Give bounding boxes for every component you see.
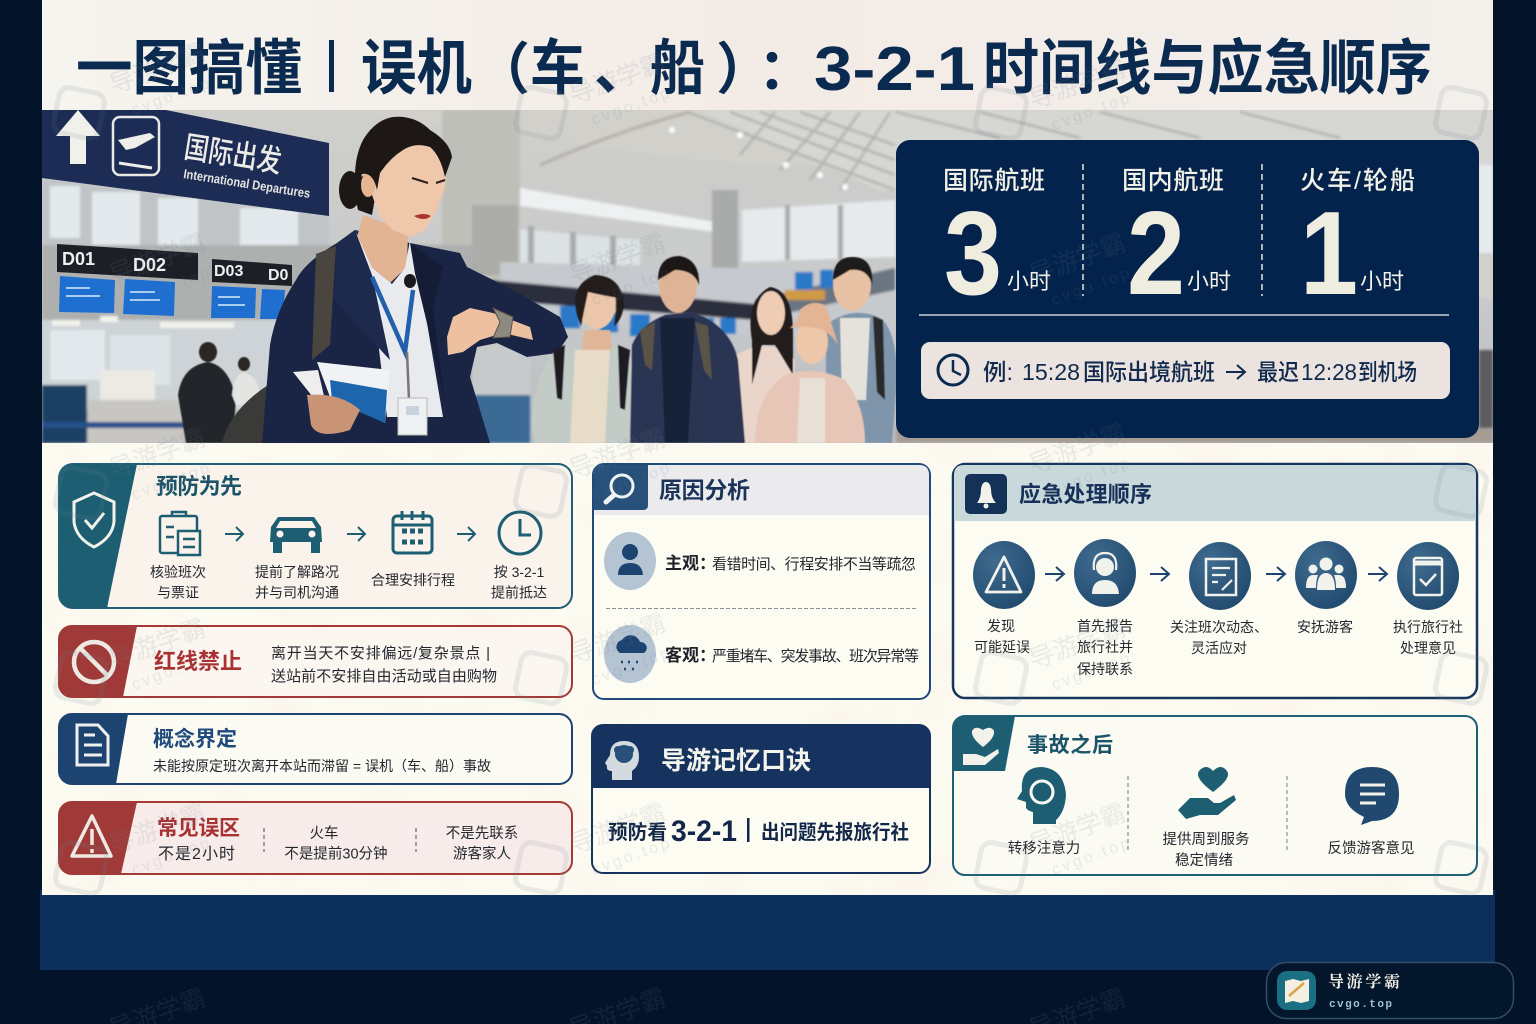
head bbox=[372, 145, 446, 237]
heading: 常见误区 bbox=[157, 817, 240, 840]
item: 火车 bbox=[310, 826, 338, 842]
watermarks: 导游学霸 bbox=[106, 39, 209, 99]
bottom blue strip bbox=[40, 890, 1495, 970]
step 5 icon bbox=[1397, 542, 1459, 610]
step label: 可能延误 bbox=[974, 639, 1030, 655]
title band bbox=[42, 0, 1493, 112]
mnemonic text: 出问题先报旅行社 bbox=[761, 821, 909, 844]
panel: causes: 看错时间、行程安排不当等疏忽 bbox=[712, 555, 916, 573]
watermarks: cvgo.top bbox=[129, 459, 215, 504]
logo badge bbox=[1266, 962, 1514, 1018]
arrow bbox=[347, 527, 365, 541]
mic bbox=[404, 274, 416, 288]
icon: clipboard bbox=[160, 512, 200, 555]
watermarks: cvgo.top bbox=[1049, 454, 1135, 499]
heading: 导游记忆口诀 bbox=[661, 747, 811, 775]
title: ： bbox=[758, 38, 814, 101]
panel: prevention bbox=[59, 464, 572, 608]
watermarks: 导游学霸 bbox=[566, 49, 669, 109]
unit hours: 小时 bbox=[1187, 269, 1231, 294]
hair bbox=[355, 116, 452, 190]
label: domestic: 国内航班 bbox=[1122, 167, 1224, 195]
watermarks: cvgo.top bbox=[129, 264, 215, 309]
icon: shield bbox=[74, 493, 114, 547]
tour group bbox=[532, 256, 897, 443]
watermarks: 导游学霸 bbox=[566, 609, 669, 669]
man bbox=[630, 312, 745, 443]
number 2: 2 bbox=[1127, 187, 1185, 320]
step label: 核验班次 bbox=[150, 564, 206, 580]
title: （ bbox=[474, 38, 530, 101]
back hair bbox=[339, 171, 357, 209]
neck bbox=[357, 215, 408, 283]
gate boards bbox=[57, 244, 292, 319]
icon: document bbox=[77, 725, 108, 765]
divider bbox=[1128, 776, 1287, 852]
icon: bell bbox=[965, 474, 1007, 514]
logo badge: 导游学霸 bbox=[1328, 973, 1400, 991]
watermarks: cvgo.top bbox=[589, 644, 675, 689]
item: 不是先联系 bbox=[446, 826, 518, 842]
panel: red line: 送站前不安排自由活动或自由购物 bbox=[271, 668, 497, 685]
example pill: 最迟 bbox=[1257, 359, 1299, 385]
watermarks: cvgo.top bbox=[129, 74, 215, 119]
step label: 提前了解路况 bbox=[255, 564, 339, 580]
example pill bbox=[921, 342, 1450, 399]
step label: 处理意见 bbox=[1400, 640, 1456, 656]
label: 提供周到服务 bbox=[1162, 832, 1250, 848]
example pill: 12:28 bbox=[1301, 359, 1357, 385]
watermarks: cvgo.top bbox=[589, 84, 675, 129]
unit hours: 小时 bbox=[1007, 269, 1051, 294]
title: 时间线与应急顺序 bbox=[983, 35, 1432, 102]
step label: 按 3-2-1 bbox=[494, 564, 544, 580]
number 3: 3 bbox=[944, 187, 1002, 320]
watermarks: 导游学霸 bbox=[106, 799, 209, 859]
icon: brain head bbox=[605, 741, 639, 780]
icon: storm cloud bbox=[604, 625, 656, 683]
icon: map logo bbox=[1277, 971, 1316, 1010]
title bbox=[76, 35, 1432, 104]
heading: 预防为先 bbox=[156, 474, 242, 499]
icon: clock bbox=[499, 512, 541, 554]
step label: 提前抵达 bbox=[491, 584, 547, 600]
watermarks: 导游学霸 bbox=[1026, 54, 1129, 114]
step label: 安抚游客 bbox=[1297, 619, 1353, 635]
title: 车 bbox=[530, 35, 585, 102]
heading: 原因分析 bbox=[659, 477, 750, 503]
watermarks: 导游学霸 bbox=[566, 799, 669, 859]
step label: 与票证 bbox=[157, 584, 199, 600]
panel: misconceptions bbox=[59, 802, 572, 874]
label: train and ship: 火车/轮船 bbox=[1300, 167, 1415, 195]
number 1: 1 bbox=[1300, 187, 1358, 320]
arrow bbox=[1150, 567, 1169, 581]
title divider bar bbox=[329, 40, 334, 92]
watermarks: 导游学霸 bbox=[1026, 799, 1129, 859]
panel: memory mnemonic bbox=[592, 725, 930, 873]
badge bbox=[398, 398, 427, 435]
step 3 icon bbox=[1189, 542, 1251, 610]
hat woman bbox=[755, 371, 865, 443]
title: 3-2-1 bbox=[814, 35, 975, 104]
step label: 合理安排行程 bbox=[371, 572, 455, 588]
watermarks: 导游学霸 bbox=[106, 614, 209, 674]
watermarks: cvgo.top bbox=[1049, 264, 1135, 309]
title: 一图搞懂 bbox=[76, 35, 302, 102]
title: ） bbox=[716, 38, 772, 101]
item: 不是2小时 bbox=[158, 845, 235, 863]
heading: 概念界定 bbox=[153, 727, 237, 751]
icon: person bbox=[604, 532, 656, 590]
step label: 灵活应对 bbox=[1191, 640, 1247, 656]
arrow bbox=[1045, 567, 1064, 581]
panel: causes: 严重堵车、突发事故、班次异常等 bbox=[712, 647, 919, 665]
step label: 并与司机沟通 bbox=[255, 584, 339, 600]
mnemonic text: 预防看 bbox=[608, 821, 667, 844]
icon: caring hand bbox=[1178, 767, 1236, 819]
strap bbox=[312, 246, 336, 360]
panel: red line bbox=[59, 626, 572, 697]
arrow bbox=[1266, 567, 1285, 581]
heading: 事故之后 bbox=[1027, 733, 1113, 757]
gate boards: D0 bbox=[268, 267, 289, 284]
watermarks: 导游学霸 bbox=[1026, 229, 1129, 289]
hero photo: airport terminal with guide and tour group bbox=[42, 110, 1493, 443]
heading: 应急处理顺序 bbox=[1019, 482, 1152, 507]
icon: car bbox=[270, 517, 322, 553]
watermarks: cvgo.top bbox=[589, 834, 675, 879]
jacket bbox=[262, 230, 568, 443]
title: 误机 bbox=[361, 35, 472, 102]
departures sign: 国际出发 bbox=[182, 130, 284, 179]
older woman bbox=[532, 346, 632, 443]
panel: causes bbox=[593, 464, 930, 699]
step 1 icon bbox=[973, 541, 1035, 609]
left windows bbox=[42, 178, 329, 270]
step 4 icon bbox=[1295, 541, 1357, 609]
gate boards: D03 bbox=[214, 263, 243, 280]
logo badge: cvgo.top bbox=[1329, 999, 1392, 1011]
watermarks: 导游学霸 bbox=[106, 229, 209, 289]
panel: emergency order bbox=[953, 464, 1477, 698]
bag bbox=[222, 386, 267, 443]
lanyard bbox=[372, 277, 413, 352]
step label: 首先报告 bbox=[1077, 618, 1133, 634]
lapels bbox=[334, 230, 390, 360]
ear bbox=[361, 173, 375, 197]
watermarks: cvgo.top bbox=[1049, 834, 1135, 879]
watermarks: cvgo.top bbox=[589, 459, 675, 504]
example pill: 国际出境航班 bbox=[1083, 359, 1215, 385]
hand & watch bbox=[447, 308, 533, 355]
watermarks: 导游学霸 bbox=[566, 229, 669, 289]
body text: 未能按原定班次离开本站而滞留 = 误机（车、船）事故 bbox=[153, 758, 491, 774]
label: 反馈游客意见 bbox=[1328, 839, 1414, 857]
step label: 关注班次动态、 bbox=[1170, 619, 1268, 635]
man in denim bbox=[826, 313, 897, 443]
unit hours: 小时 bbox=[1360, 269, 1404, 294]
step label: 发现 bbox=[987, 618, 1015, 634]
item: 不是提前30分钟 bbox=[284, 846, 388, 862]
icon: heart in hand bbox=[963, 728, 999, 765]
example pill: 15:28 bbox=[1022, 359, 1080, 385]
watermarks: 导游学霸 bbox=[106, 424, 209, 484]
title: 、 bbox=[594, 38, 650, 101]
gate boards: D01 bbox=[62, 249, 95, 269]
watermarks: 导游学霸 bbox=[1026, 419, 1129, 479]
subjective cause: 主观： bbox=[665, 554, 716, 573]
example pill: 到机场 bbox=[1358, 359, 1417, 385]
step label: 旅行社并 bbox=[1077, 639, 1133, 655]
icon: calendar bbox=[393, 511, 432, 553]
label: 稳定情绪 bbox=[1175, 852, 1233, 869]
watermarks: cvgo.top bbox=[129, 834, 215, 879]
guide bbox=[222, 117, 568, 443]
panel: after the incident bbox=[953, 716, 1477, 875]
tickets bbox=[293, 370, 324, 396]
label: 转移注意力 bbox=[1008, 839, 1080, 857]
young woman bbox=[736, 346, 795, 443]
arrow bbox=[457, 527, 475, 541]
heading: 红线禁止 bbox=[154, 649, 242, 674]
title: 船 bbox=[650, 35, 705, 102]
watermarks: cvgo.top bbox=[589, 264, 675, 309]
arrow bbox=[1368, 567, 1387, 581]
example pill: 例: bbox=[983, 359, 1013, 385]
icon: prohibited bbox=[74, 642, 114, 682]
lower content background bbox=[42, 443, 1493, 895]
body text: 离开当天不安排偏远/复杂景点 | bbox=[271, 644, 490, 662]
watermarks: cvgo.top bbox=[1049, 89, 1135, 134]
objective cause: 客观： bbox=[665, 645, 716, 665]
step label: 执行旅行社 bbox=[1393, 619, 1463, 635]
step 2 icon bbox=[1074, 539, 1136, 607]
departures sign bbox=[42, 110, 329, 216]
watermarks: cvgo.top bbox=[129, 649, 215, 694]
departures sign: International Departures bbox=[183, 166, 311, 201]
item: 游客家人 bbox=[453, 846, 511, 862]
icon: speech bubble bbox=[1345, 767, 1399, 825]
step label: 保持联系 bbox=[1077, 661, 1133, 677]
gate boards: D02 bbox=[133, 255, 166, 275]
label: international: 国际航班 bbox=[943, 167, 1045, 195]
watermarks: 导游学霸 bbox=[1026, 614, 1129, 674]
icon: warning bbox=[72, 816, 111, 856]
panel: 3-2-1 timeline bbox=[896, 140, 1479, 438]
hand holding bbox=[307, 395, 360, 434]
background travellers bbox=[178, 342, 260, 443]
icon: magnifier bbox=[606, 475, 633, 502]
panel: definition bbox=[59, 714, 572, 784]
mnemonic text bbox=[608, 815, 909, 848]
shirt bbox=[355, 230, 443, 417]
arrow bbox=[225, 527, 243, 541]
mnemonic text: 3-2-1 bbox=[671, 815, 737, 848]
watermarks: cvgo.top bbox=[1049, 649, 1135, 694]
icon: head bbox=[1017, 767, 1066, 824]
watermarks: 导游学霸 bbox=[566, 424, 669, 484]
